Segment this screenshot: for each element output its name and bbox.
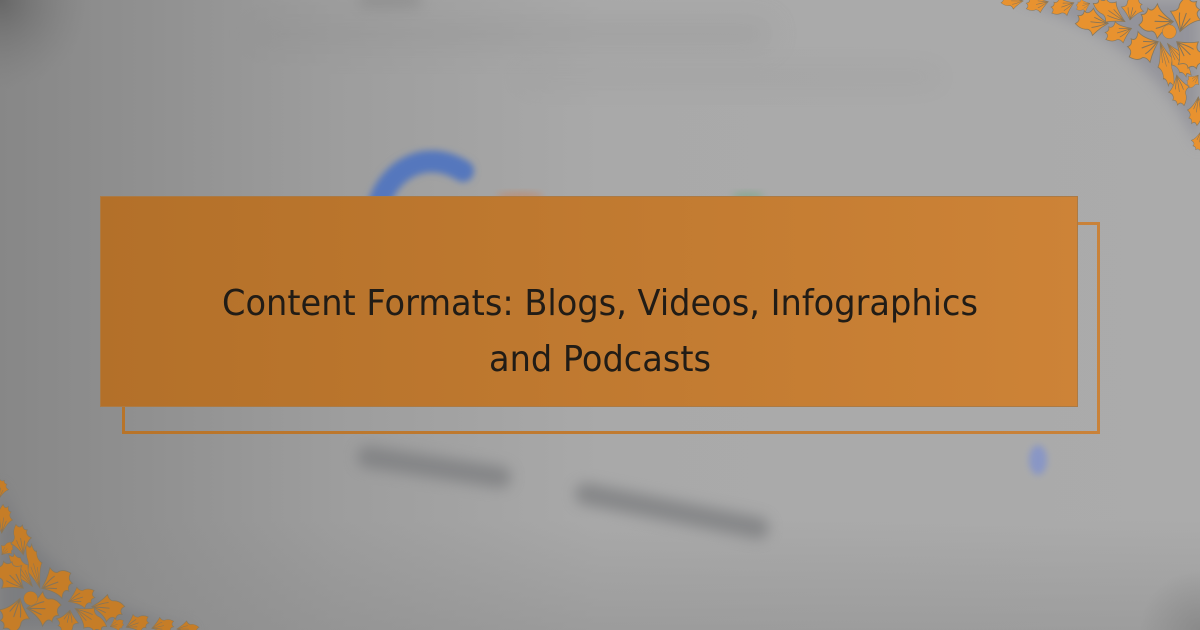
blurred button label left <box>368 457 500 477</box>
blurred button label right <box>586 494 758 528</box>
title <box>222 283 978 380</box>
title: and Podcasts <box>489 339 711 380</box>
ornament: bottom-left corner <box>0 478 199 630</box>
title banner <box>100 196 1078 406</box>
blurred logo arc <box>379 162 463 203</box>
frame outline behind banner <box>124 224 1098 432</box>
blurred logo traces <box>496 192 544 200</box>
ornament: top-right corner <box>1001 0 1200 152</box>
blurred blue dot <box>1029 445 1047 475</box>
title: Content Formats: Blogs, Videos, Infographics <box>222 283 978 324</box>
